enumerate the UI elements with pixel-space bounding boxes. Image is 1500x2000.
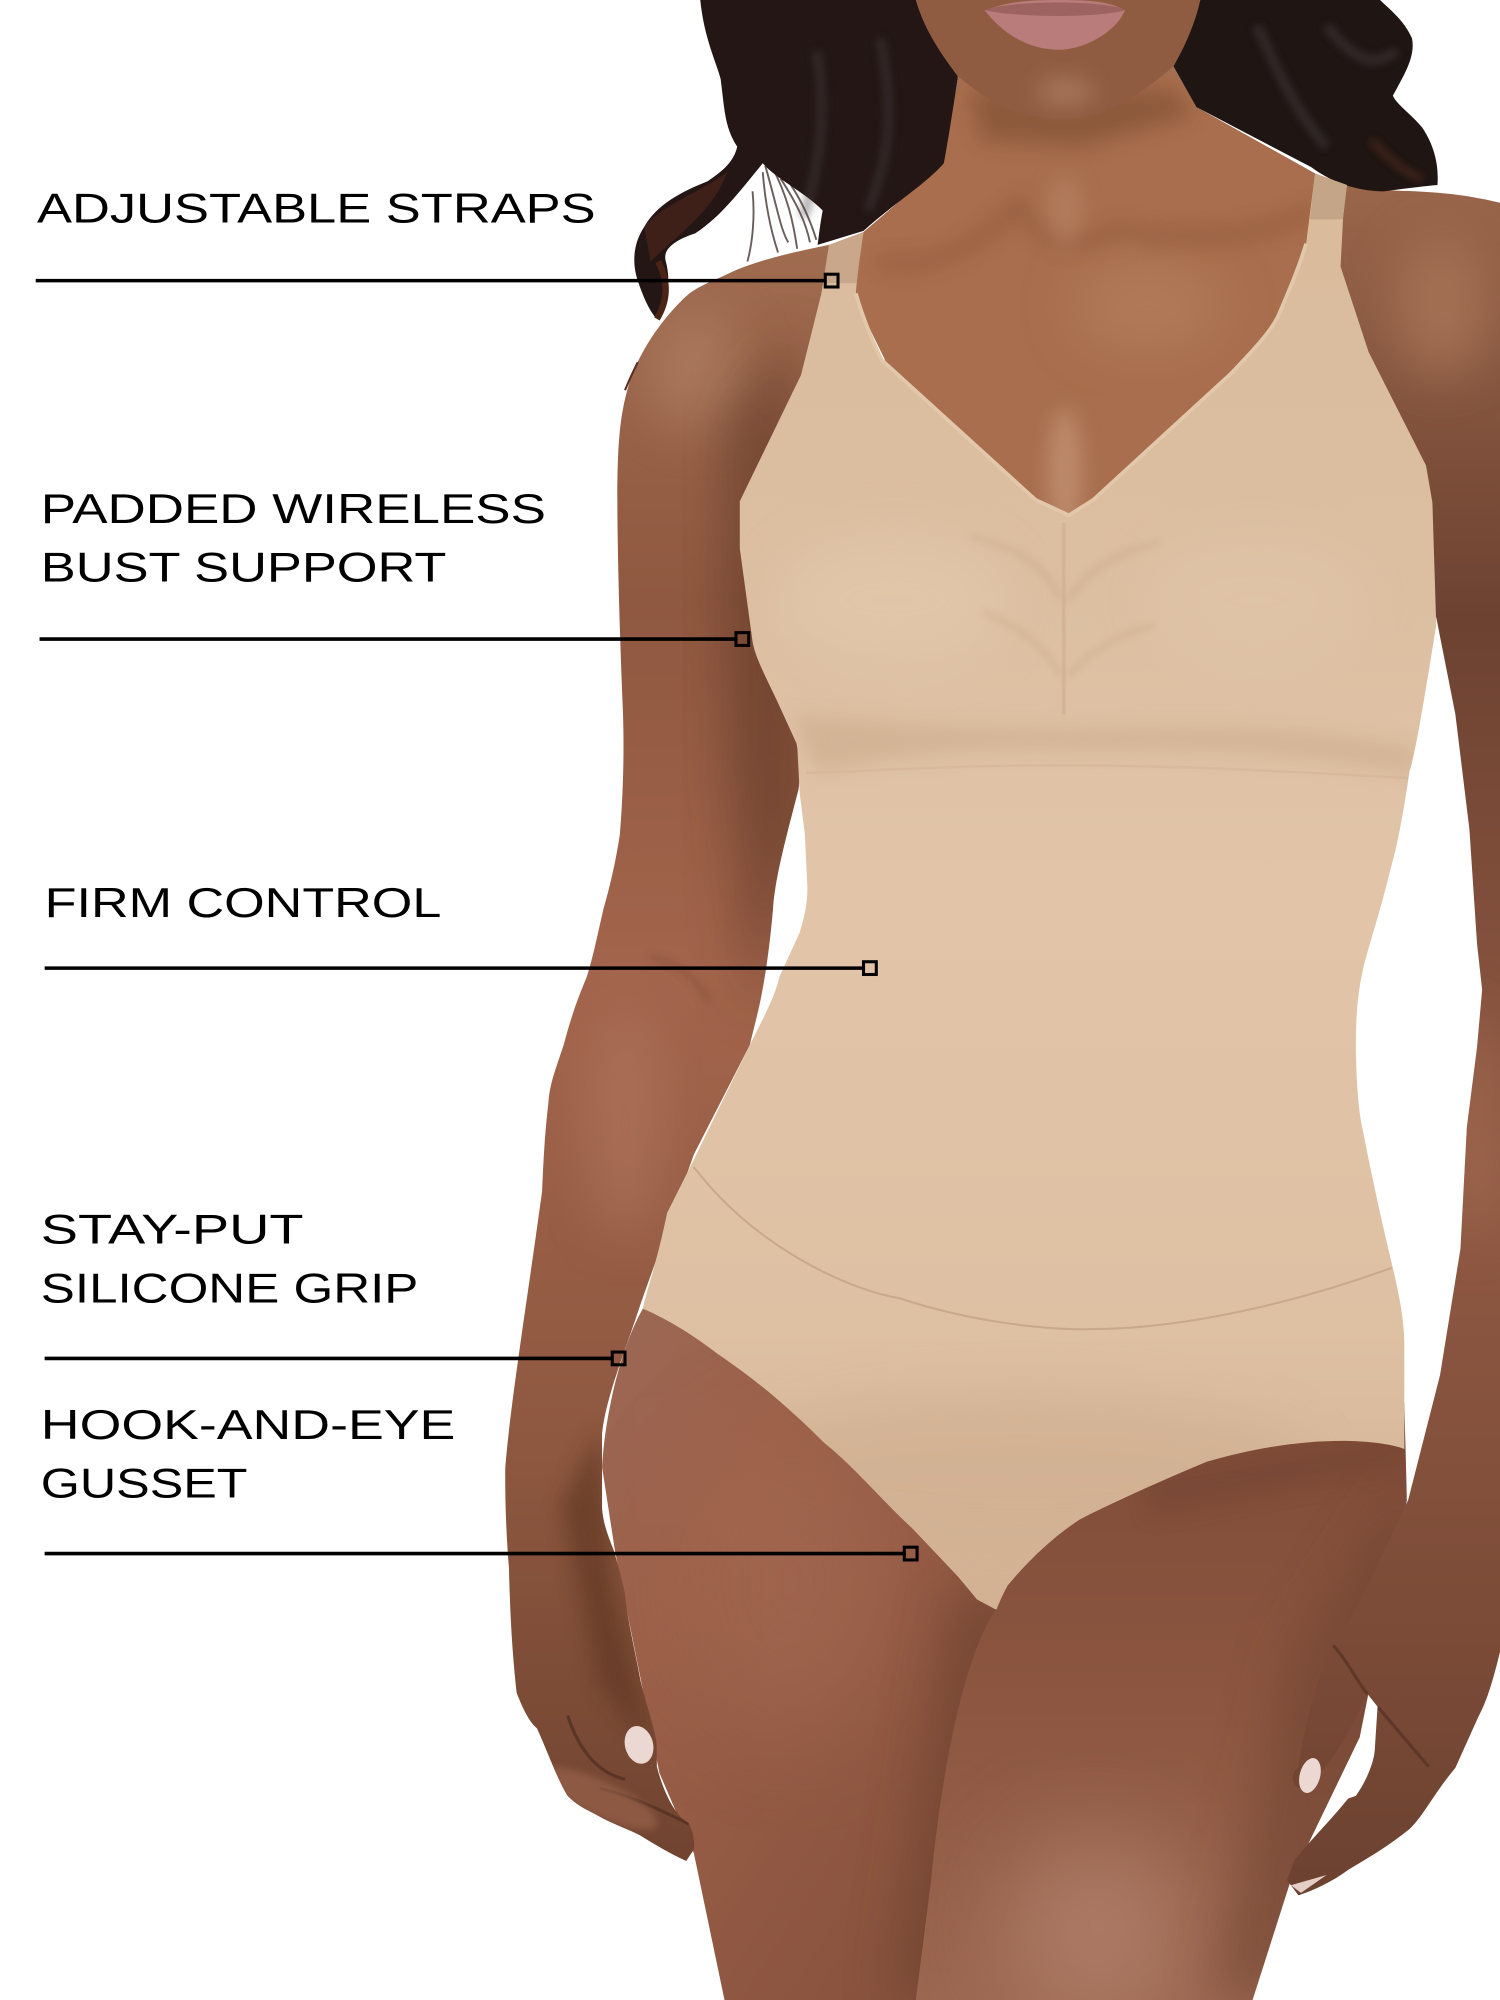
face (916, 0, 1200, 119)
under bust seam (806, 765, 1408, 778)
chest, shoulder and right arm (816, 64, 1500, 1913)
left arm and hand (505, 244, 830, 1861)
right hand creases (1333, 1645, 1429, 1767)
gathers (969, 536, 1161, 676)
hair right (1173, 0, 1438, 191)
bodysuit garment (625, 166, 1441, 1620)
left thigh (602, 1308, 996, 2000)
callout: hook-and-eye gusset: HOOK-AND-EYE (41, 1401, 455, 1448)
hair left (634, 0, 958, 319)
fingers (568, 1716, 689, 1824)
callout: hook-and-eye gusset: GUSSET (41, 1459, 247, 1506)
callout: padded wireless bust support: BUST SUPPORT (41, 544, 446, 591)
callout: adjustable straps: ADJUSTABLE STRAPS (37, 185, 596, 232)
callout: padded wireless bust support: PADDED WIRELESS (41, 485, 546, 532)
callout: firm control (45, 879, 876, 974)
callout: stay-put silicone grip (41, 1206, 625, 1365)
neckline trim (856, 244, 1306, 515)
nails (621, 1723, 1327, 1893)
model photo illustration (497, 0, 1500, 2000)
bust shadow (800, 717, 1414, 772)
callout: padded wireless bust support (40, 485, 749, 645)
right thigh (906, 1403, 1429, 2000)
waist seam (694, 1167, 1392, 1329)
callout: stay-put silicone grip: SILICONE GRIP (41, 1264, 418, 1311)
hip band shading (840, 1435, 1203, 1456)
stray hair wisp at arm (625, 362, 638, 390)
callout: firm control: FIRM CONTROL (45, 879, 441, 926)
straps (1310, 173, 1347, 219)
lips (985, 0, 1125, 50)
callout: adjustable straps (36, 185, 838, 287)
callout: stay-put silicone grip: STAY-PUT (41, 1206, 304, 1253)
callout: hook-and-eye gusset (41, 1401, 917, 1560)
